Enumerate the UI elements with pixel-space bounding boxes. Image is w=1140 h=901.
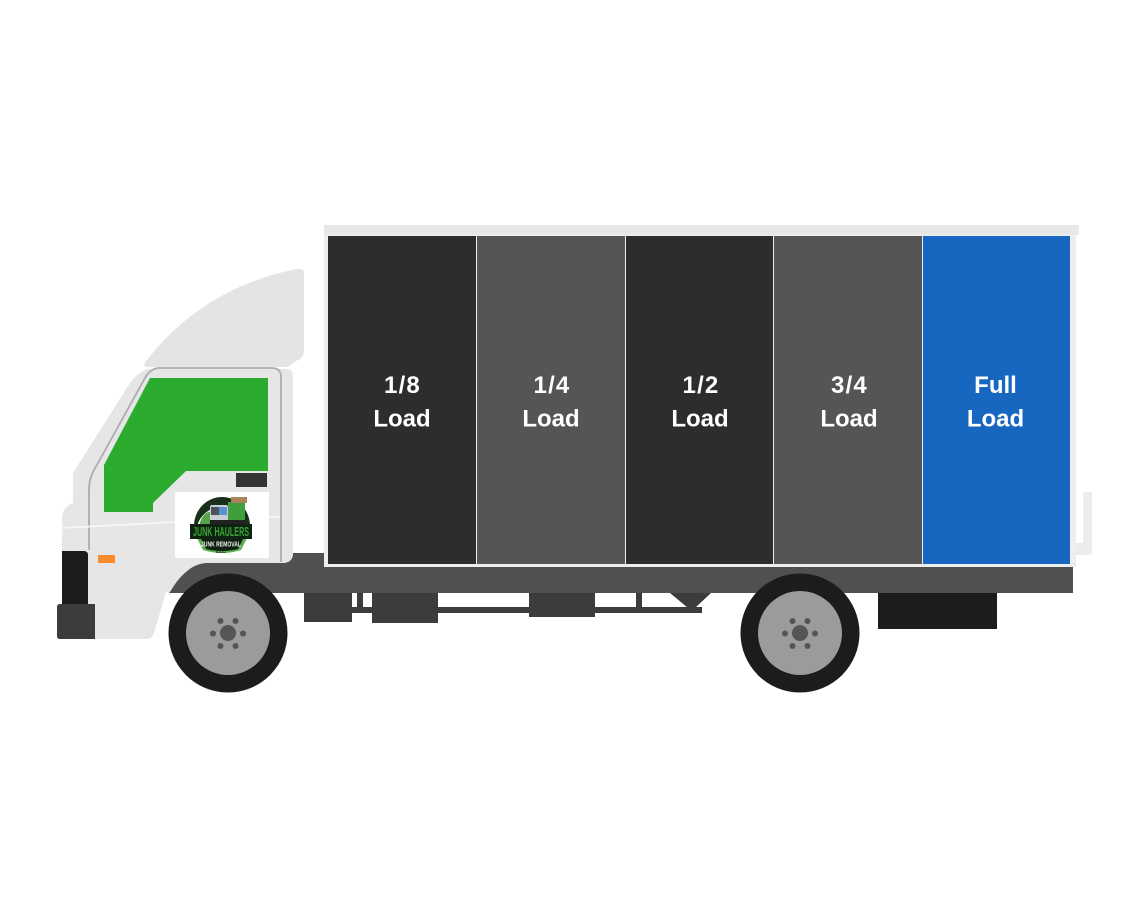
cab body crease [62, 517, 280, 528]
panel: 1/2 load: 1/2 [683, 372, 719, 399]
company logo [175, 492, 269, 558]
panel: 1/4 load [477, 236, 625, 564]
rear step box [878, 593, 997, 629]
panel: 3/4 load: Load [820, 406, 878, 432]
panel: 1/4 load: Load [522, 406, 580, 432]
panel: 1/8 load: Load [373, 406, 431, 432]
panel: 1/8 load [328, 236, 476, 564]
green window [104, 378, 268, 512]
under-body parts [304, 593, 711, 623]
company logo: LLC [216, 549, 226, 555]
roof strip [324, 225, 1079, 235]
panel: 1/8 load: 1/8 [384, 372, 421, 399]
panel: 3/4 load: 3/4 [831, 372, 868, 399]
company logo: JUNK REMOVAL [201, 542, 242, 548]
panel: full load [923, 236, 1070, 564]
cab lower body and shell [62, 369, 293, 639]
panel: 1/2 load [626, 236, 773, 564]
rear bracket [1076, 492, 1092, 555]
cargo box shell [324, 226, 1076, 567]
front upright bumper [62, 551, 88, 604]
side mirror [236, 473, 267, 487]
cab door outline [89, 368, 281, 562]
front marker light [98, 555, 115, 563]
company logo: JUNK HAULERS [193, 525, 249, 539]
panel: full load: Full [974, 372, 1017, 399]
rear wheel [740, 574, 860, 692]
front wheel [168, 574, 288, 692]
panel: 3/4 load [774, 236, 922, 564]
chassis frame [169, 553, 1073, 593]
front bumper [57, 604, 95, 639]
panel: full load: Load [967, 406, 1024, 432]
panel: 1/4 load: 1/4 [534, 372, 570, 399]
truck [57, 225, 1092, 692]
panel: 1/2 load: Load [671, 406, 729, 432]
roof fairing [144, 269, 304, 367]
